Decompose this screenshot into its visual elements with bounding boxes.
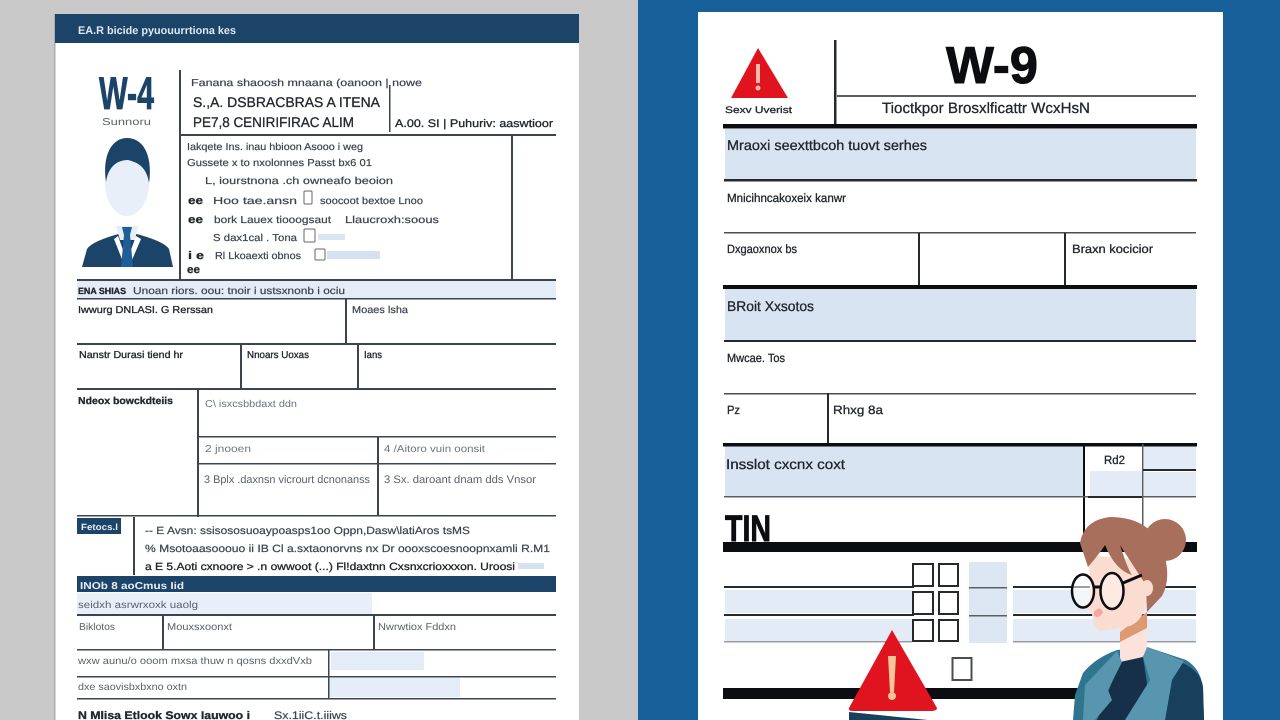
W-4 lower fields: Mouxsxoonxt	[167, 622, 232, 633]
W-9 field labels: Mwcae. Tos	[727, 351, 785, 365]
W-4 instruction block: i e	[188, 250, 204, 262]
W-4 address and name fields: ENA SHIAS	[78, 286, 126, 296]
W-9 field labels: Insslot cxcnx coxt	[726, 456, 845, 472]
W-4 address and name fields: 4 /Aitoro vuin oonsit	[384, 444, 485, 455]
W-4 address and name fields: Unoan riors. oou: tnoir i ustsxnonb i ociu	[133, 286, 345, 297]
W-4 instruction block: Iakqete Ins. inau hbioon Asooo i weg	[187, 142, 363, 153]
W-4 instruction block: Hoo tae.ansn	[213, 196, 297, 207]
W-4 employee title block: A.00. SI | Puhuriv: aaswtioor	[395, 118, 553, 130]
W-4 header bar	[55, 14, 579, 43]
W-4 notes badge	[77, 518, 121, 534]
illustration: woman with glasses	[1072, 517, 1204, 720]
icon: employee avatar	[82, 138, 173, 267]
W-9 shaded bands	[725, 129, 1196, 643]
W-4 lower fields: dxe saovisbxbxno oxtn	[78, 682, 187, 693]
W-4 instruction block: ee	[188, 195, 203, 207]
W-4 header bar: EA.R bicide pyuouurrtiona kes	[78, 25, 236, 37]
W-4 employee title block: Fanana shaoosh mnaana (oanoon | nowe	[191, 78, 423, 89]
W-4 form title	[99, 67, 154, 128]
W-4 address and name fields: Ndeox bowckdteiis	[78, 396, 173, 407]
W-4 address and name fields: 3 Sx. daroant dnam dds Vnsor	[384, 474, 536, 486]
W-4 instruction block: ee	[187, 264, 200, 276]
panel: W-4 form	[54, 14, 579, 720]
W-4 notes text: -- E Avsn: ssisososuoaypoasps1oo Oppn,Dasw\latiAros tsMS	[145, 525, 470, 537]
W-9 field labels: Mraoxi seexttbcoh tuovt serhes	[727, 137, 927, 153]
W-4 instruction block: Gussete x to nxolonnes Passt bx6 01	[187, 158, 372, 169]
W-4 instruction block: bork Lauex tiooogsaut	[214, 215, 331, 226]
W-9 field labels: Braxn kocicior	[1072, 242, 1153, 256]
W-4 notes text: % Msotoaasooouo ii IB Cl a.sxtaonorvns nx Dr oooxscoesnoopnxamli R.M1	[145, 543, 550, 555]
W-9 field labels: Rhxg 8a	[833, 403, 883, 417]
TIN digit boxes	[913, 564, 972, 680]
W-4 notes text: a E 5.Aoti cxnoore > .n owwoot (...) Fl!daxtnn Cxsnxcrioxxxon. Uroosi	[145, 561, 515, 573]
W-4 notes badge: Fetocs.l	[81, 522, 118, 532]
W-4 lower fields: seidxh asrwrxoxk uaolg	[78, 600, 198, 611]
W-4 instruction block: soocoot bextoe Lnoo	[320, 196, 423, 207]
W-4 form title: W-4	[99, 67, 154, 119]
W-9 field labels: Rd2	[1104, 453, 1125, 467]
icon: warning triangle large	[849, 630, 937, 720]
W-4 footer line	[78, 710, 348, 720]
W-4 section band	[77, 576, 556, 592]
W-4 instruction block	[187, 142, 439, 276]
W-9 field labels: Pz	[727, 403, 740, 417]
W-4 notes text	[145, 525, 550, 573]
W-4 lower fields: wxw aunu/o ooom mxsa thuw n qosns dxxdVxb	[77, 656, 312, 667]
W-4 address and name fields: Moaes lsha	[352, 305, 408, 316]
W-4 form grid lines	[77, 70, 556, 700]
W-4 address and name fields: Nnoars Uoxas	[247, 350, 309, 361]
W-9 title: W-9	[946, 37, 1038, 95]
W-4 address and name fields: Nanstr Durasi tiend hr	[79, 350, 184, 361]
W-4 instruction block: L, iourstnona .ch owneafo beoion	[205, 176, 393, 187]
W-4 lower fields: Nwrwtiox Fddxn	[378, 622, 456, 633]
warning caption: Sexv Uverist	[725, 105, 792, 116]
W-4 employee title block	[191, 78, 553, 130]
W-9 field labels: Mnicihncakoxeix kanwr	[727, 191, 846, 205]
W-4 address and name fields: Ians	[364, 350, 382, 361]
W-4 address and name fields	[78, 286, 536, 486]
panel: W-9 form	[698, 12, 1223, 720]
icon: warning triangle small	[731, 48, 788, 98]
W-4 employee title block: S.,A. DSBRACBRAS A ITENA	[193, 94, 381, 110]
W-4 address and name fields: 2 jnooen	[205, 444, 251, 455]
W-9 field labels: BRoit Xxsotos	[727, 298, 814, 314]
W-4 instruction block: Rl Lkoaexti obnos	[215, 251, 301, 262]
W-9 subtitle: Tioctkpor Brosxlficattr WcxHsN	[882, 100, 1090, 117]
W-4 address and name fields: Iwwurg DNLASI. G Rerssan	[78, 305, 213, 316]
W-9 field labels: Dxgaoxnox bs	[727, 242, 797, 256]
W-4 form title: Sunnoru	[102, 117, 151, 128]
W-4 lower fields	[77, 600, 456, 693]
TIN heading: TIN	[725, 508, 771, 549]
W-4 address and name fields: 3 Bplx .daxnsn vicrourt dcnonanss	[204, 474, 370, 486]
W-4 instruction block: S dax1cal . Tona	[213, 233, 297, 244]
W-9 field labels	[726, 137, 1153, 472]
W-4 instruction block: ee	[188, 214, 203, 226]
W-9 grid lines	[723, 40, 1197, 699]
W-4 employee title block: PE7,8 CENIRIFIRAC ALIM	[193, 114, 354, 130]
W-4 address and name fields: C\ isxcsbbdaxt ddn	[205, 399, 297, 410]
W-4 section band: INOb 8 aoCmus Iid	[80, 581, 184, 592]
W-4 instruction block: Llaucroxh:soous	[345, 215, 439, 226]
W-4 lower fields: Biklotos	[79, 622, 115, 633]
